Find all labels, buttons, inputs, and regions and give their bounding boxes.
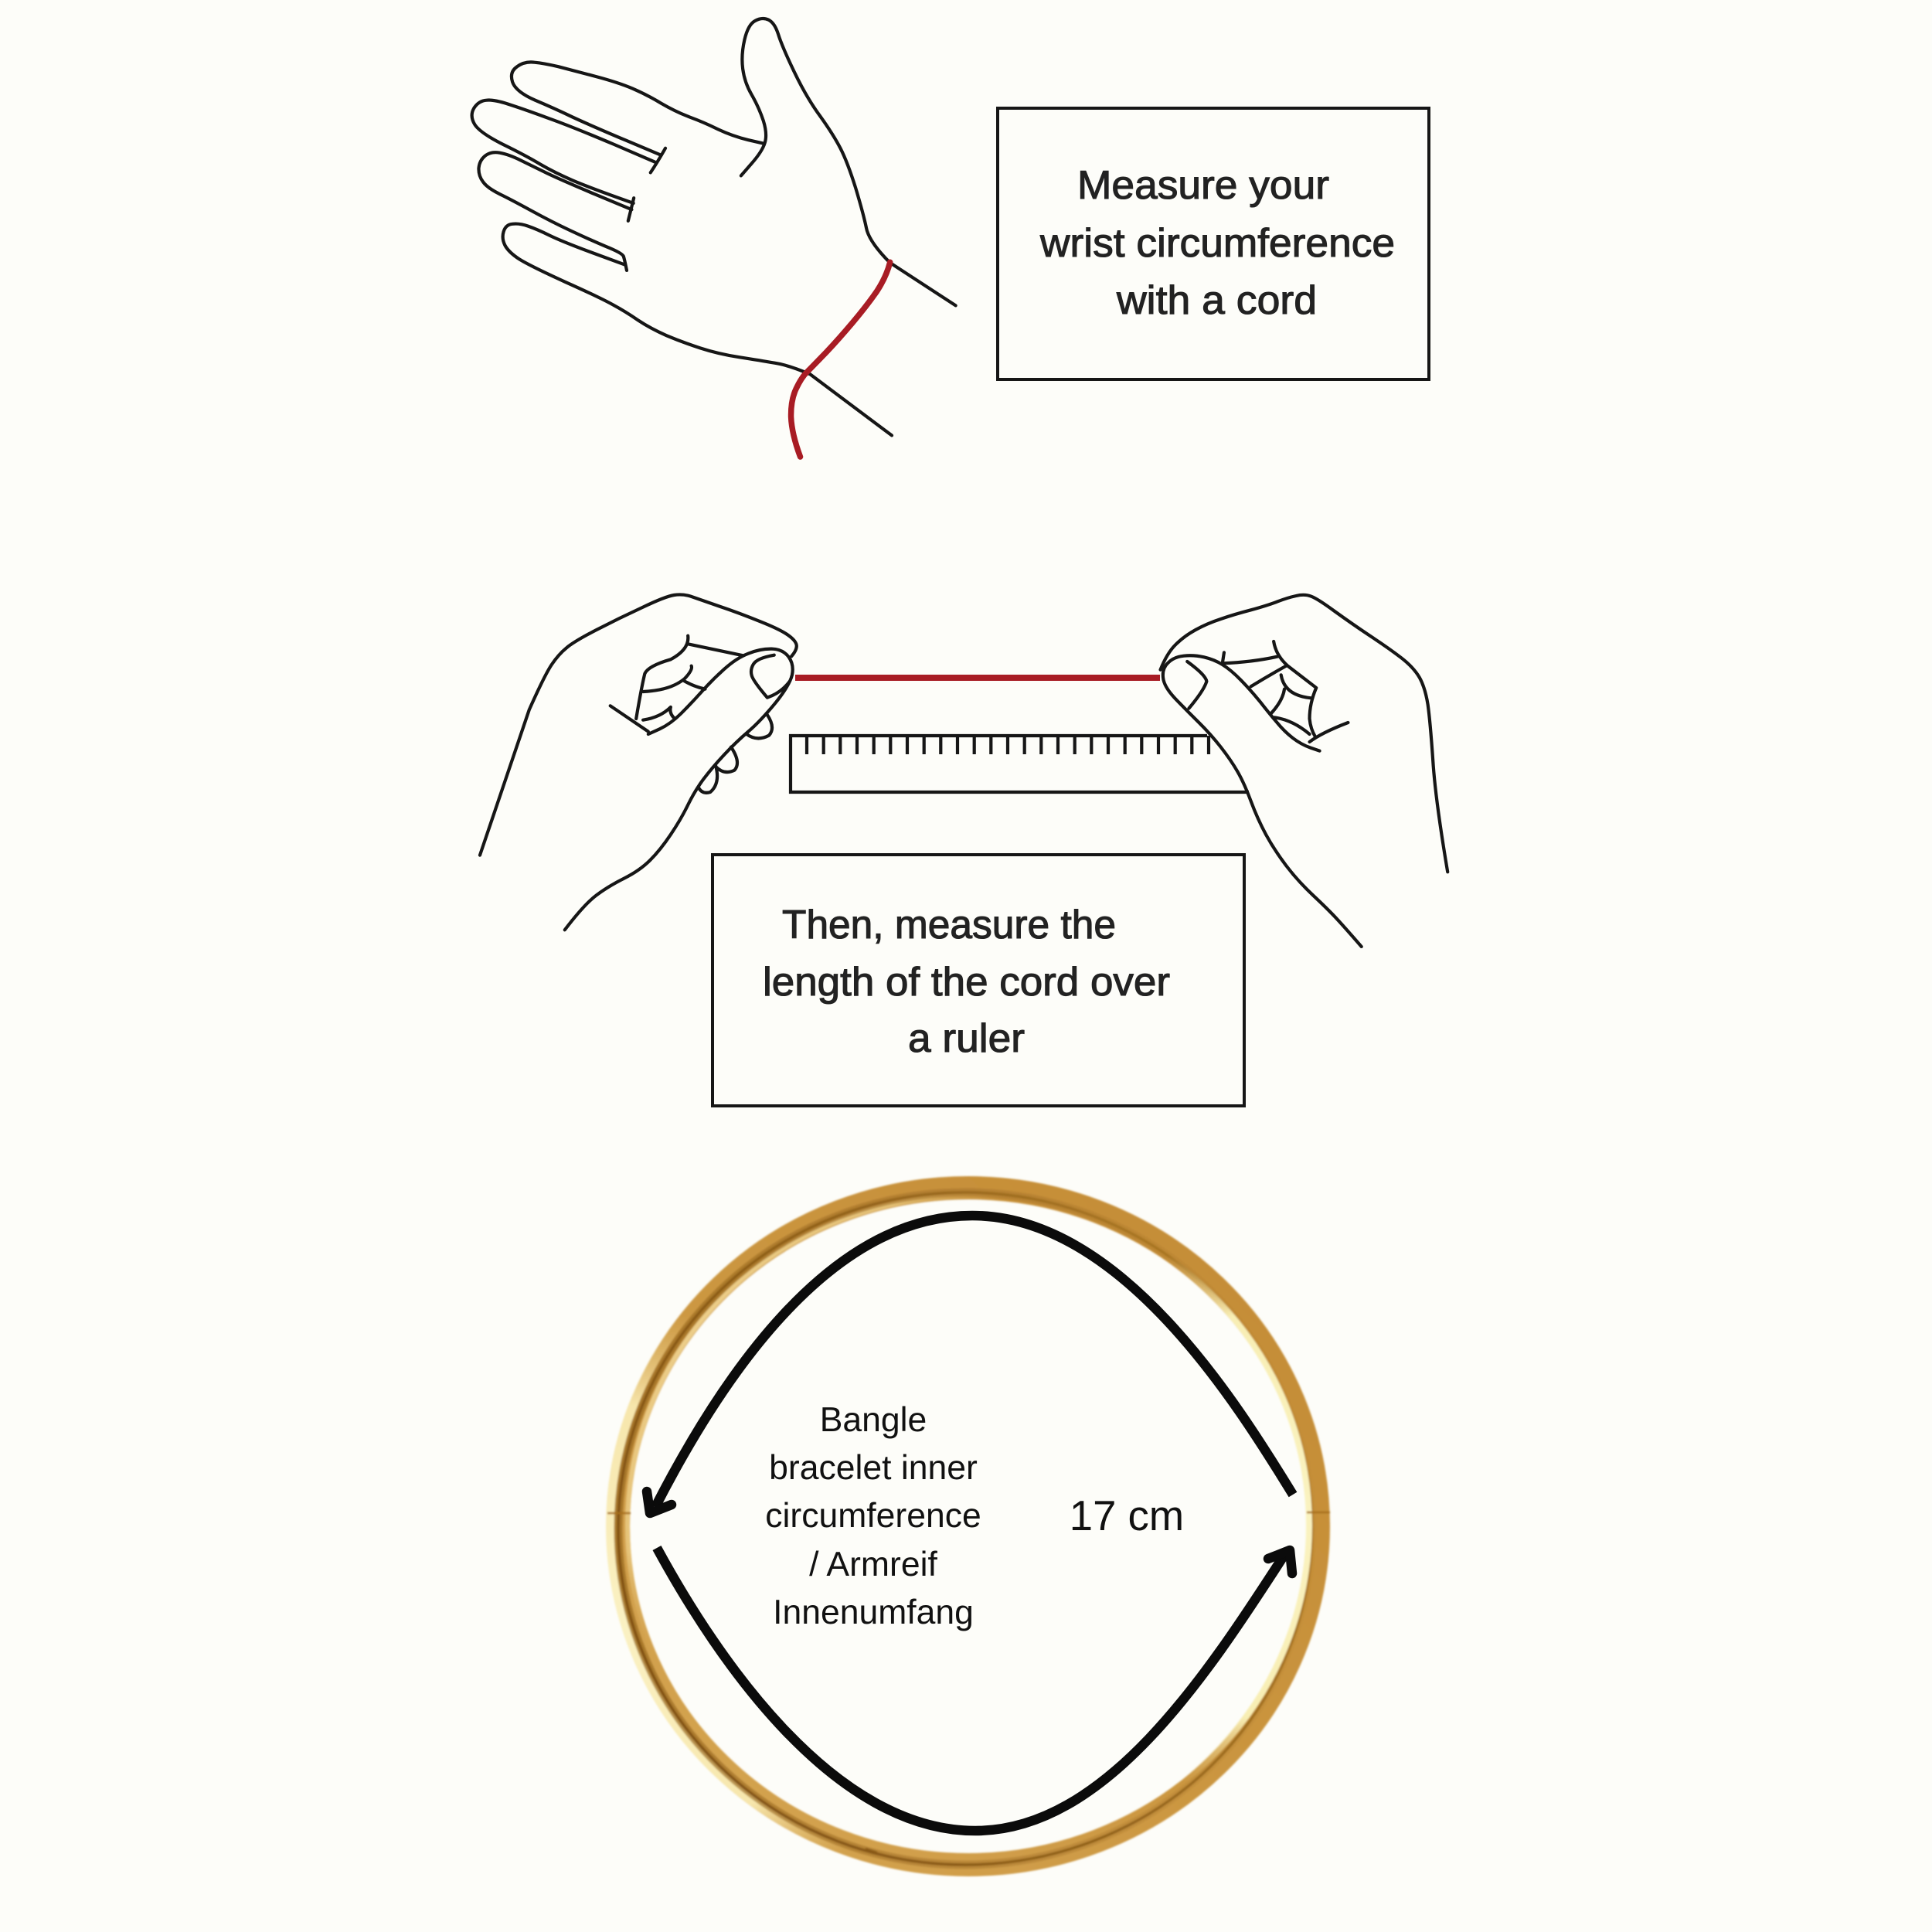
measurement value: 17 cm bbox=[1070, 1492, 1184, 1539]
fingertips behind thumb bbox=[699, 715, 772, 793]
ring finger bbox=[478, 152, 631, 270]
label: bangle inner circumference: Bangle bbox=[820, 1401, 927, 1439]
thumbnail bbox=[751, 655, 790, 698]
little finger and inner wrist outline bbox=[503, 224, 892, 435]
label: bangle inner circumference: circumference bbox=[765, 1497, 981, 1535]
back of hand bbox=[1161, 595, 1447, 872]
label: bangle inner circumference: Innenumfang bbox=[773, 1594, 974, 1631]
text box: step 1: with a cord bbox=[1116, 278, 1317, 323]
finger details bbox=[1223, 641, 1348, 742]
text box: step 2: a ruler bbox=[908, 1016, 1025, 1061]
label: bangle inner circumference bbox=[765, 1401, 981, 1631]
middle finger bbox=[472, 100, 655, 221]
thumb and wrist bbox=[565, 649, 793, 930]
red cord held straight bbox=[795, 675, 1160, 681]
ruler bbox=[791, 736, 1249, 792]
red cord around wrist bbox=[791, 262, 890, 457]
text box: step 1: wrist circumference bbox=[1039, 221, 1395, 266]
thumb and wrist bbox=[1163, 655, 1362, 947]
gold bangle bracelet bbox=[607, 1182, 1330, 1871]
arrow: upper arc to left bbox=[647, 1216, 1293, 1513]
text box: step 1: Measure your bbox=[1077, 163, 1329, 208]
illustration: open hand with red cord around wrist bbox=[472, 19, 956, 457]
text box: step 2: length of the cord over bbox=[763, 960, 1170, 1005]
label: bangle inner circumference: / Armreif bbox=[809, 1546, 937, 1583]
illustration: right hand holding cord bbox=[1161, 595, 1447, 947]
arrow: lower arc to right bbox=[657, 1548, 1292, 1831]
finger details bbox=[611, 636, 743, 732]
text box: step 2: Then, measure the bbox=[782, 903, 1116, 947]
text box: step 2 bbox=[713, 855, 1244, 1106]
thumb and outer wrist outline bbox=[741, 19, 956, 305]
illustration: left hand holding cord bbox=[480, 594, 797, 930]
index finger bbox=[512, 62, 764, 172]
back of hand bbox=[480, 594, 797, 855]
text box: step 1 bbox=[998, 108, 1429, 379]
label: bangle inner circumference: bracelet inner bbox=[769, 1449, 978, 1487]
thumbnail bbox=[1187, 662, 1206, 709]
